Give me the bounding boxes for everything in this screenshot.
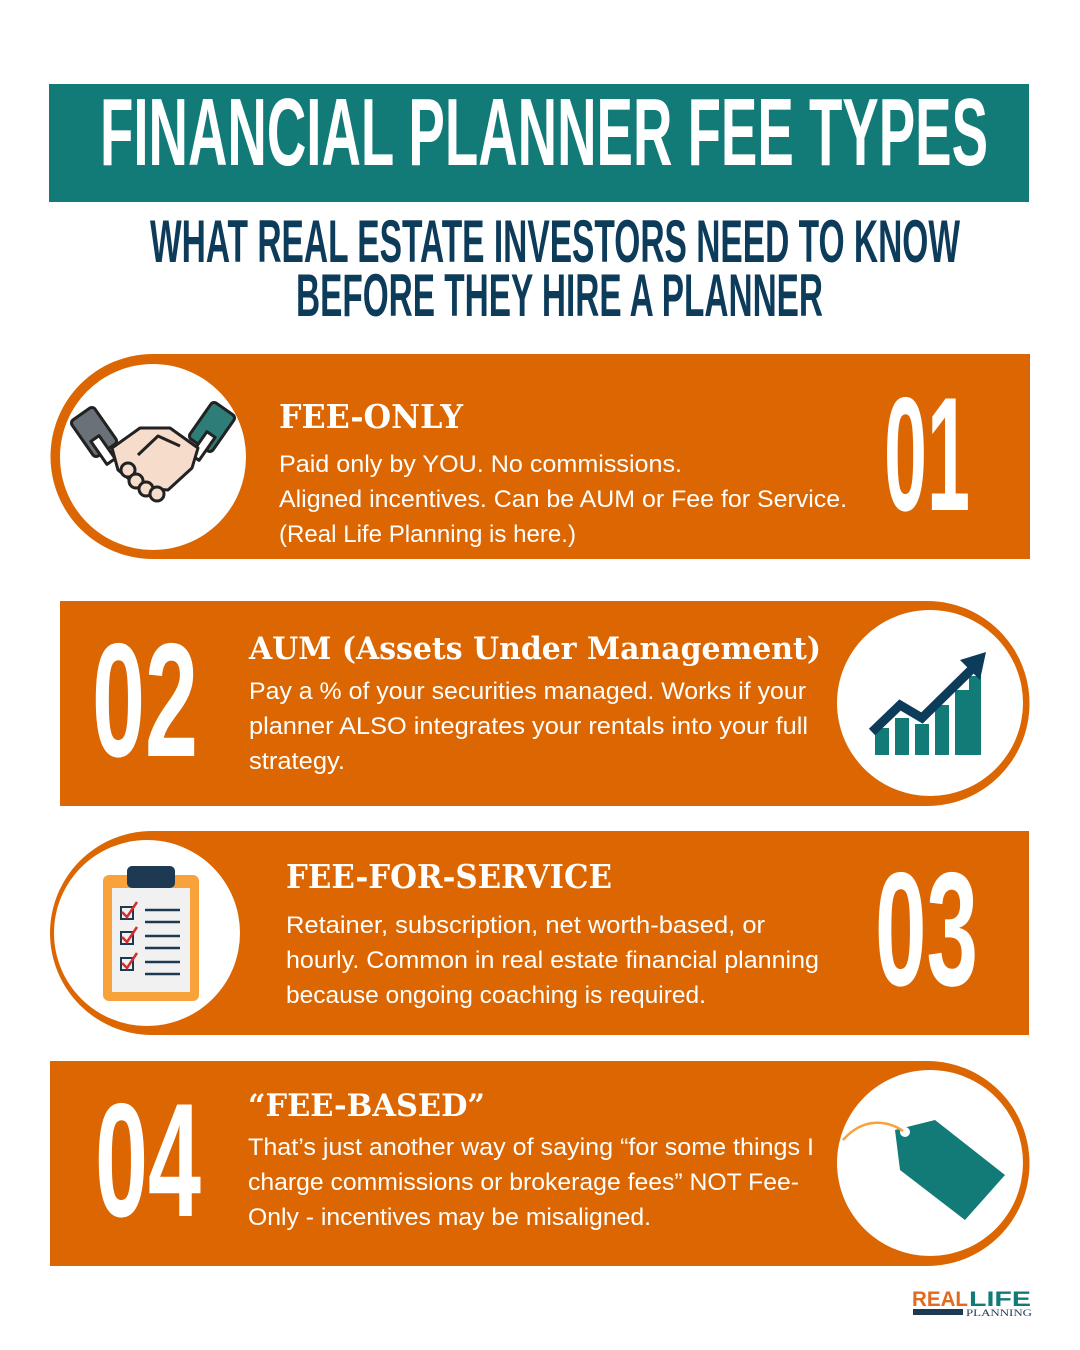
panel: fee-only: 01: [884, 364, 970, 545]
subtitle: [150, 208, 960, 329]
panel: fee-based: [50, 1061, 1030, 1266]
logo: [912, 1288, 1033, 1318]
text block: Pay a % of your securities managed. Works if your: [249, 678, 806, 705]
text block: strategy.: [249, 748, 345, 775]
logo: REAL: [912, 1288, 968, 1311]
number 03: 03: [875, 839, 978, 1020]
text block: [249, 678, 808, 775]
text block: (Real Life Planning is here.): [279, 521, 576, 548]
text block: hourly. Common in real estate financial planning: [286, 947, 819, 974]
number 04: 04: [95, 1070, 201, 1251]
heading: FEE-ONLY: [279, 397, 463, 436]
icon: price tag: [837, 1070, 1023, 1256]
logo: PLANNING: [966, 1308, 1033, 1318]
logo: LIFE: [969, 1288, 1031, 1311]
text block: charge commissions or brokerage fees” NOT Fee-: [248, 1169, 799, 1196]
panel: fee-only: [50, 354, 1030, 559]
text block: [248, 1134, 814, 1231]
text block: planner ALSO integrates your rentals into your full: [249, 713, 808, 740]
text block: Aligned incentives. Can be AUM or Fee for Service.: [279, 486, 847, 513]
icon: growth chart: [837, 610, 1023, 796]
text block: That’s just another way of saying “for some things I: [248, 1134, 814, 1161]
panel: fee-for-service: [50, 831, 1029, 1035]
icon: clipboard: [54, 840, 240, 1026]
panel: AUM: [60, 601, 1030, 806]
text block: Only - incentives may be misaligned.: [248, 1204, 651, 1231]
text block: [279, 451, 847, 548]
icon: handshake: [60, 364, 246, 550]
text block: Retainer, subscription, net worth-based, or: [286, 912, 765, 939]
heading: AUM (Assets Under Management): [248, 631, 821, 667]
text block: Paid only by YOU. No commissions.: [279, 451, 682, 478]
heading: “FEE-BASED”: [248, 1088, 485, 1124]
text block: [286, 912, 819, 1009]
heading: FEE-FOR-SERVICE: [286, 857, 612, 896]
text block: because ongoing coaching is required.: [286, 982, 706, 1009]
number 02: 02: [92, 610, 198, 791]
